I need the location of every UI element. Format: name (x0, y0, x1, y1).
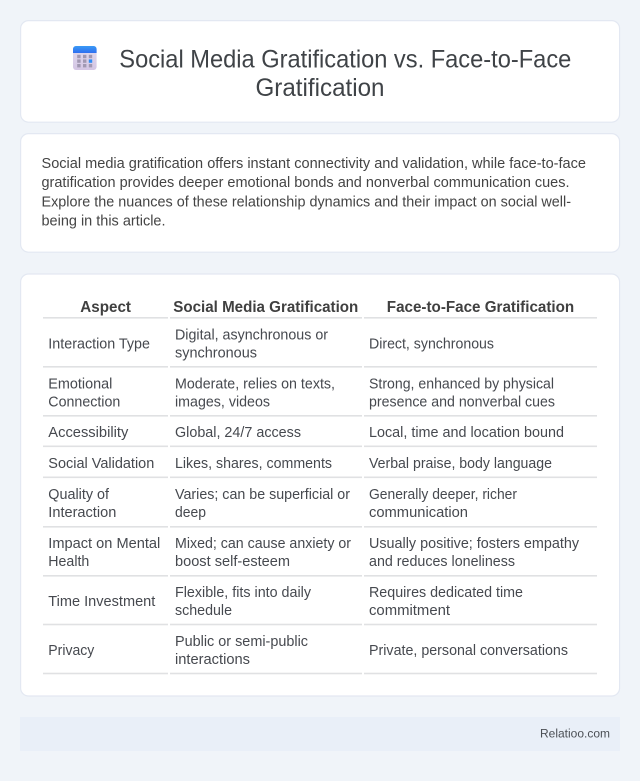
row: accessibility: Local, time and location bound (369, 425, 564, 441)
row: emotional connection: presence and nonverbal cues (369, 394, 555, 410)
panel: title card (21, 21, 620, 122)
intro paragraph: Explore the nuances of these relationship dynamics and their impact on social well- (42, 194, 571, 210)
table header: Face-to-Face Gratification (387, 299, 574, 316)
row: time investment: Time Investment (48, 594, 155, 610)
row: interaction type (43, 327, 597, 368)
row: accessibility: Global, 24/7 access (175, 425, 301, 441)
row: time investment: Flexible, fits into daily (175, 585, 312, 601)
row: quality of interaction: Quality of (48, 487, 109, 503)
row: quality of interaction: communication (369, 505, 468, 521)
row: emotional connection: Connection (48, 394, 120, 410)
row: interaction type: Digital, asynchronous or (175, 327, 328, 343)
footer bar (20, 717, 620, 751)
row: emotional connection: Emotional (48, 376, 112, 392)
row: impact on mental health: boost self-esteem (175, 554, 290, 570)
panel: comparison table (21, 274, 620, 696)
intro paragraph: being in this article. (42, 214, 166, 230)
row: privacy: Private, personal conversations (369, 643, 568, 659)
row: social validation (43, 456, 597, 478)
row: time investment (43, 585, 597, 625)
title: Gratification (256, 75, 384, 102)
table header (43, 299, 597, 319)
row: impact on mental health: Health (48, 554, 89, 570)
row: impact on mental health: Impact on Mental (48, 536, 160, 552)
row: accessibility: Accessibility (48, 425, 129, 441)
row: emotional connection: Moderate, relies on texts, (175, 376, 335, 392)
title: Social Media Gratification vs. Face-to-Face (119, 46, 571, 74)
row: quality of interaction: deep (175, 505, 206, 521)
row: quality of interaction (43, 487, 597, 528)
footer bar: Relatioo.com (540, 727, 610, 741)
row: social validation: Verbal praise, body language (369, 456, 552, 472)
row: interaction type: synchronous (175, 345, 257, 361)
row: social validation: Likes, shares, comments (175, 456, 332, 472)
row: interaction type: Direct, synchronous (369, 336, 494, 352)
intro paragraph: Social media gratification offers instant connectivity and validation, while face-to-face (42, 156, 586, 172)
row: impact on mental health (43, 536, 597, 577)
row: privacy: interactions (175, 652, 250, 668)
row: time investment: commitment (369, 603, 450, 619)
table header: Social Media Gratification (173, 299, 358, 316)
row: time investment: Requires dedicated time (369, 585, 523, 601)
row: privacy: Privacy (48, 643, 95, 659)
table header: Aspect (80, 299, 131, 316)
icon: calendar (73, 46, 97, 70)
row: impact on mental health: and reduces loneliness (369, 554, 515, 570)
row: privacy: Public or semi-public (175, 634, 308, 650)
title (119, 46, 571, 102)
panel: intro card (21, 134, 620, 252)
row: impact on mental health: Usually positive; fosters empathy (369, 536, 580, 552)
row: quality of interaction: Generally deeper, richer (369, 487, 517, 503)
row: impact on mental health: Mixed; can cause anxiety or (175, 536, 351, 552)
row: emotional connection (43, 376, 597, 417)
row: time investment: schedule (175, 603, 232, 619)
row: accessibility (43, 425, 597, 447)
row: quality of interaction: Varies; can be superficial or (175, 487, 350, 503)
row: social validation: Social Validation (48, 456, 154, 472)
intro paragraph: gratification provides deeper emotional bonds and nonverbal communication cues. (42, 175, 570, 191)
intro paragraph (42, 156, 586, 230)
row: emotional connection: images, videos (175, 394, 270, 410)
row: privacy (43, 634, 597, 674)
row: emotional connection: Strong, enhanced by physical (369, 376, 554, 392)
row: interaction type: Interaction Type (48, 336, 150, 352)
row: quality of interaction: Interaction (48, 505, 116, 521)
